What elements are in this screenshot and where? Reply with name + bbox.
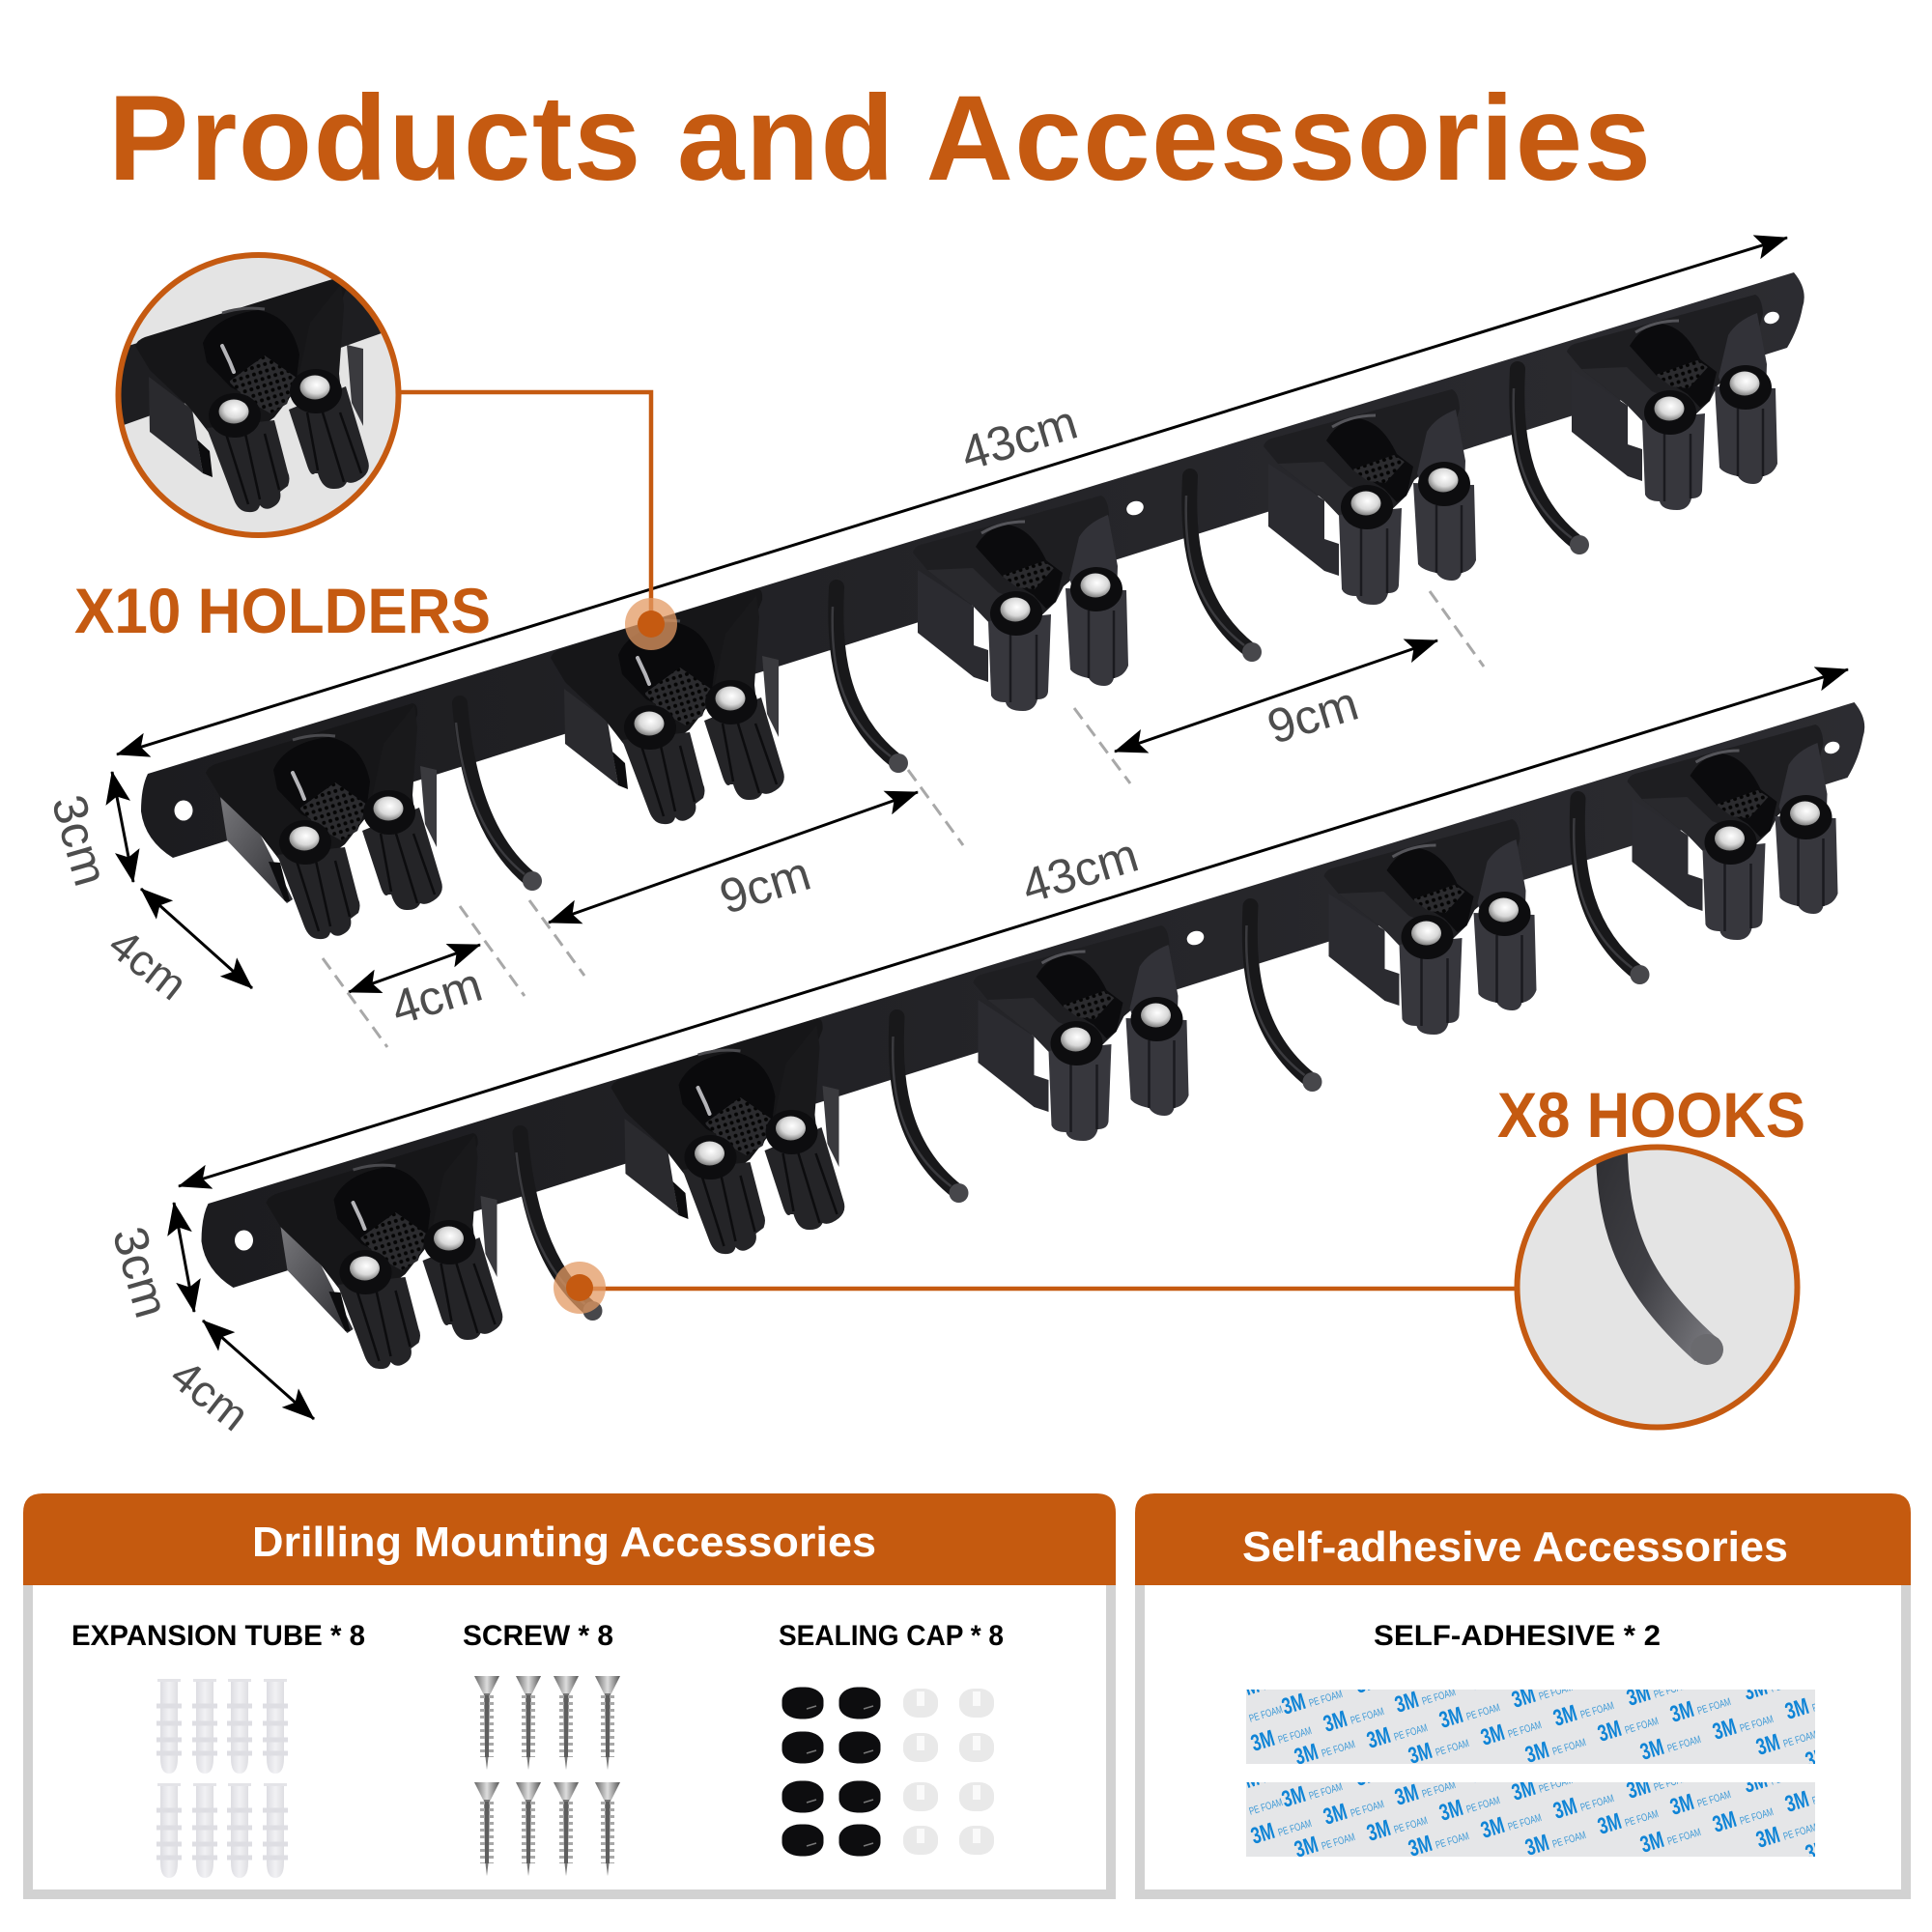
arrow: 4cm spacing bbox=[349, 945, 480, 992]
connector line: hook callout bbox=[580, 1287, 1515, 1291]
label: sealing cap: SEALING CAP * 8 bbox=[779, 1620, 1004, 1652]
adhesive strip 1: 3MPE FOAM bbox=[1741, 1663, 1806, 1705]
adhesive strip 1: 3MPE FOAM bbox=[1478, 1709, 1544, 1750]
adhesive strip 2: 3MPE FOAM bbox=[1292, 1821, 1357, 1862]
arrow: 43cm upper bbox=[117, 238, 1787, 754]
adhesive strip 2: 3MPE FOAM bbox=[1466, 1747, 1532, 1788]
screws bbox=[474, 1676, 620, 1876]
adhesive strip 2: 3MPE FOAM bbox=[1436, 1784, 1502, 1826]
adhesive strip 1: 3MPE FOAM bbox=[1248, 1715, 1314, 1756]
adhesive strip 2: 3MPE FOAM bbox=[1233, 1754, 1298, 1796]
adhesive strip 1: 3MPE FOAM bbox=[1233, 1662, 1298, 1703]
adhesive strip 2: 3MPE FOAM bbox=[1803, 1825, 1868, 1866]
adhesive strip 1: 3MPE FOAM bbox=[1595, 1705, 1661, 1747]
adhesive strip 2: 3MPE FOAM bbox=[1364, 1804, 1430, 1846]
adhesive strip 1: 3MPE FOAM bbox=[1667, 1686, 1733, 1727]
panel header bbox=[1135, 1493, 1911, 1585]
adhesive strip 2: 3MPE FOAM bbox=[1321, 1788, 1386, 1830]
connector line: holder callout bbox=[401, 392, 651, 623]
marker dot: hook bbox=[554, 1262, 606, 1314]
arrow: 3cm upper bbox=[112, 772, 133, 882]
label: 4cm depth lower: 4cm bbox=[161, 1350, 259, 1440]
label: self-adhesive: SELF-ADHESIVE * 2 bbox=[1374, 1620, 1661, 1652]
adhesive strip 1 bbox=[1246, 1690, 1815, 1764]
label: 43cm lower: 43cm bbox=[1015, 828, 1145, 914]
arrow: 43cm lower bbox=[179, 669, 1848, 1186]
rack 2: lower rail with holders and hooks bbox=[201, 702, 1864, 1369]
adhesive strip 2: 3MPE FOAM bbox=[1478, 1802, 1544, 1843]
panel: drilling mounting accessories bbox=[23, 1493, 1116, 1899]
adhesive strip 1: 3MPE FOAM bbox=[1522, 1726, 1588, 1768]
arrow: 9cm left bbox=[549, 792, 918, 923]
arrow: 4cm depth lower bbox=[203, 1321, 314, 1419]
adhesive strip 2: 3MPE FOAM bbox=[1741, 1756, 1806, 1798]
marker dot: holder bbox=[625, 598, 677, 650]
label: 9cm right: 9cm bbox=[1262, 676, 1364, 754]
adhesive strip 1: 3MPE FOAM bbox=[1321, 1695, 1386, 1737]
adhesive strip 1: 3MPE FOAM bbox=[1550, 1690, 1616, 1731]
adhesive strip 2: 3MPE FOAM bbox=[1595, 1798, 1661, 1839]
label: 3cm lower: 3cm bbox=[102, 1221, 180, 1323]
adhesive strip 1: 3MPE FOAM bbox=[1219, 1693, 1285, 1735]
adhesive strip 2: 3MPE FOAM bbox=[1782, 1776, 1848, 1817]
label: 4cm spacing: 4cm bbox=[385, 957, 488, 1036]
adhesive strip 1: 3MPE FOAM bbox=[1406, 1727, 1471, 1769]
adhesive strip 1: 3MPE FOAM bbox=[1753, 1719, 1819, 1760]
label: 3cm upper: 3cm bbox=[42, 789, 119, 892]
adhesive strip 1: 3MPE FOAM bbox=[1292, 1728, 1357, 1770]
adhesive strip 2: 3MPE FOAM bbox=[1392, 1769, 1458, 1810]
adhesive strip 1: 3MPE FOAM bbox=[1710, 1703, 1776, 1745]
adhesive strip 1: 3MPE FOAM bbox=[1637, 1723, 1703, 1765]
adhesive strip 1: 3MPE FOAM bbox=[1624, 1669, 1690, 1711]
callout: holder zoom circle bbox=[97, 255, 406, 535]
adhesive strip 1: 3MPE FOAM bbox=[1392, 1676, 1458, 1718]
adhesive strip 1: 3MPE FOAM bbox=[1352, 1657, 1418, 1698]
expansion tubes bbox=[156, 1679, 288, 1878]
sealing caps bbox=[782, 1687, 994, 1857]
label: X8 HOOKS: X8 HOOKS bbox=[1497, 1079, 1805, 1151]
arrow: 9cm right bbox=[1115, 640, 1437, 752]
title: Products and Accessories bbox=[108, 71, 1651, 206]
adhesive strip 1: 3MPE FOAM bbox=[1466, 1654, 1532, 1695]
label: 9cm left: 9cm bbox=[714, 846, 816, 924]
adhesive strip 2: 3MPE FOAM bbox=[1624, 1762, 1690, 1804]
heading: self-adhesive: Self-adhesive Accessories bbox=[1242, 1523, 1788, 1571]
label: 43cm upper: 43cm bbox=[954, 395, 1084, 481]
label: screw: SCREW * 8 bbox=[463, 1620, 613, 1652]
adhesive strip 2: 3MPE FOAM bbox=[1248, 1807, 1314, 1849]
label: 4cm depth upper: 4cm bbox=[99, 919, 197, 1009]
label: expansion tube: EXPANSION TUBE * 8 bbox=[71, 1620, 365, 1652]
adhesive strip 2: 3MPE FOAM bbox=[1352, 1749, 1418, 1791]
adhesive strip 2: 3MPE FOAM bbox=[1753, 1811, 1819, 1853]
adhesive strip 1: 3MPE FOAM bbox=[1803, 1732, 1868, 1774]
adhesive strip 2: 3MPE FOAM bbox=[1522, 1819, 1588, 1861]
adhesive strip 1: 3MPE FOAM bbox=[1509, 1671, 1575, 1713]
label: X10 HOLDERS: X10 HOLDERS bbox=[74, 575, 491, 646]
arrow: 4cm depth upper bbox=[141, 889, 252, 988]
adhesive strip 1: 3MPE FOAM bbox=[1436, 1691, 1502, 1733]
panel: self-adhesive accessories bbox=[1135, 1493, 1911, 1899]
heading: drilling: Drilling Mounting Accessories bbox=[252, 1519, 876, 1566]
dimension arrows and labels bbox=[42, 238, 1848, 1440]
callout: hook zoom circle bbox=[1517, 1130, 1797, 1428]
adhesive strip 2: 3MPE FOAM bbox=[1509, 1764, 1575, 1805]
adhesive strip 2: 3MPE FOAM bbox=[1667, 1778, 1733, 1820]
panel header bbox=[23, 1493, 1116, 1585]
arrow: 3cm lower bbox=[174, 1203, 194, 1312]
adhesive strip 2 bbox=[1246, 1782, 1815, 1857]
adhesive strip 2: 3MPE FOAM bbox=[1219, 1786, 1285, 1828]
adhesive strip 2: 3MPE FOAM bbox=[1406, 1820, 1471, 1861]
adhesive strip 2: 3MPE FOAM bbox=[1550, 1782, 1616, 1824]
rack 1: upper rail with holders and hooks bbox=[141, 272, 1804, 939]
adhesive strip 1: 3MPE FOAM bbox=[1782, 1683, 1848, 1724]
adhesive strip 1: 3MPE FOAM bbox=[1364, 1712, 1430, 1753]
adhesive strip 2: 3MPE FOAM bbox=[1637, 1816, 1703, 1858]
adhesive strip 2: 3MPE FOAM bbox=[1710, 1796, 1776, 1837]
adhesive strip 1: 3MPE FOAM bbox=[1279, 1678, 1345, 1719]
adhesive strip 2: 3MPE FOAM bbox=[1279, 1771, 1345, 1812]
